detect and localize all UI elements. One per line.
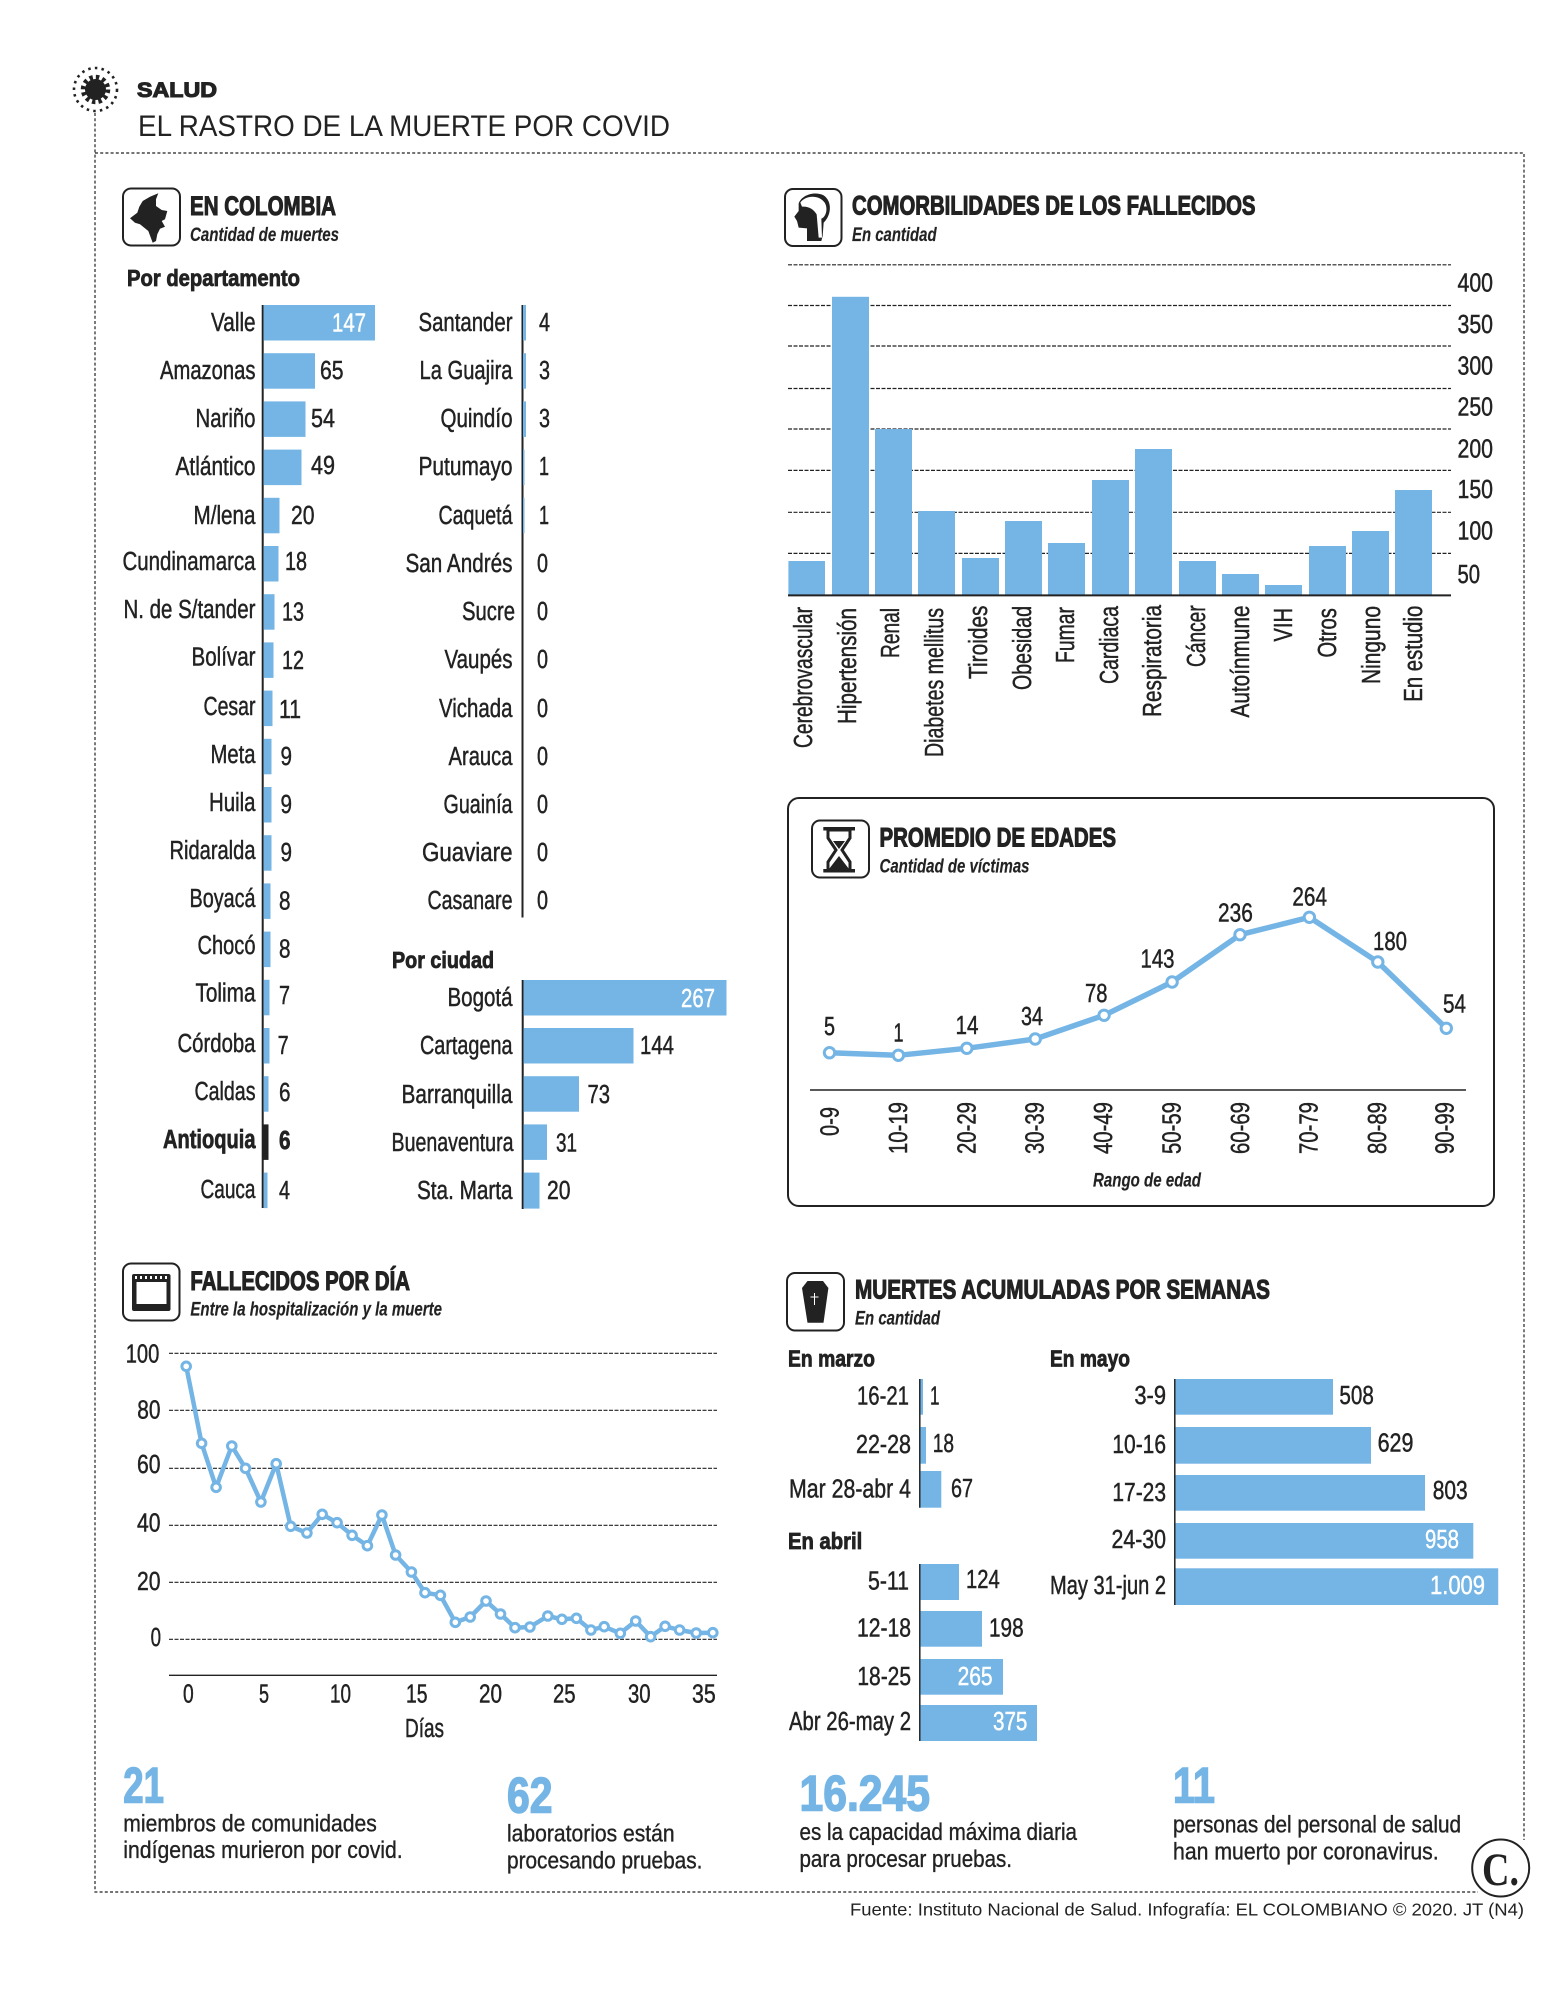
stat: 21	[123, 1757, 403, 1864]
title: EL RASTRO DE LA MUERTE POR COVID	[138, 110, 670, 143]
bar chart: marzo	[788, 1346, 973, 1508]
row: Vichada: 0	[537, 695, 548, 723]
age range labels: 50-59	[1159, 1102, 1187, 1154]
row: Meta: 9	[280, 743, 292, 771]
row: 16-21: 1	[930, 1382, 940, 1410]
row: Córdoba: Córdoba	[178, 1030, 256, 1058]
stat: 11: han muerto por coronavirus.	[1173, 1838, 1439, 1865]
y axis labels: 60	[137, 1451, 160, 1479]
age range labels: 10-19	[885, 1102, 913, 1154]
y axis labels: 200	[1458, 435, 1493, 463]
data values: 236	[1218, 899, 1253, 927]
x axis labels: Renal	[877, 608, 905, 658]
axis title: Días	[405, 1715, 444, 1743]
panel: muertes acumuladas	[787, 1273, 1498, 1741]
x axis labels: 35	[692, 1681, 716, 1709]
heading: en colombia: EN COLOMBIA	[190, 191, 336, 221]
row: M/lena: 20	[291, 502, 314, 530]
row: 18-25: 18-25	[857, 1663, 911, 1691]
row: Mar 28-abr 4: Mar 28-abr 4	[789, 1475, 911, 1503]
row: Barranquilla: Barranquilla	[402, 1081, 513, 1109]
stat: 11: personas del personal de salud	[1173, 1812, 1461, 1839]
row: Amazonas	[160, 353, 344, 389]
row: 22-28: 22-28	[856, 1431, 911, 1459]
data values: 34	[1021, 1003, 1043, 1031]
row: 18-25: 265	[958, 1663, 993, 1691]
row: Nariño	[196, 401, 335, 437]
row: Quindío: 3	[539, 405, 550, 433]
row: Cartagena: 144	[640, 1032, 674, 1060]
x axis labels: Cerebrovascular	[790, 607, 818, 748]
bar chart: comorbidities	[788, 265, 1493, 757]
row: Huila: 9	[280, 791, 292, 819]
row: 10-16: 10-16	[1112, 1431, 1166, 1459]
stat: 16.245: 16.245	[800, 1766, 930, 1822]
row: Atlántico: 49	[311, 452, 335, 480]
data values: 143	[1140, 946, 1174, 974]
row: Buenaventura	[392, 1124, 577, 1160]
data values: 264	[1292, 883, 1327, 911]
row: Cesar: Cesar	[204, 693, 256, 721]
x axis labels: Diabetes mellitus	[921, 608, 949, 757]
y axis labels: 0	[151, 1624, 161, 1652]
stat: 62: laboratorios están	[507, 1821, 675, 1848]
row: 10-16	[1112, 1427, 1414, 1464]
y axis labels	[126, 1340, 161, 1652]
row: Cauca: Cauca	[200, 1176, 256, 1204]
subheading: en mayo: En mayo	[1050, 1346, 1130, 1372]
row: Bogotá: 267	[681, 985, 715, 1013]
row: Sta. Marta: Sta. Marta	[417, 1177, 513, 1205]
row: Bogotá: Bogotá	[448, 984, 513, 1012]
bar chart: departments column 1	[122, 305, 375, 1208]
row: Ridaralda: 9	[280, 839, 292, 867]
row: Bogotá	[448, 980, 726, 1016]
row: Cartagena	[420, 1028, 674, 1064]
stat: 62: 62	[507, 1767, 552, 1823]
panel: promedio de edades	[788, 798, 1494, 1206]
row: Atlántico	[176, 450, 335, 485]
row: Boyacá	[190, 883, 290, 919]
y axis labels: 300	[1458, 353, 1493, 381]
row: Valle: Valle	[211, 309, 256, 337]
header	[74, 68, 670, 143]
row: N. de S/tander: N. de S/tander	[124, 596, 256, 624]
data values: 14	[956, 1012, 978, 1040]
row: Cartagena: Cartagena	[420, 1032, 513, 1060]
subheading: en abril: En abril	[788, 1528, 862, 1554]
panel: fallecidos por dia	[123, 1264, 717, 1743]
row: Abr 26-may 2: 375	[993, 1708, 1027, 1736]
x axis labels: VIH	[1270, 608, 1298, 642]
y axis labels: 80	[137, 1397, 160, 1425]
row: Sucre: Sucre	[462, 598, 515, 626]
x axis labels: Tiroides	[965, 606, 993, 679]
bar chart: abril	[788, 1528, 1037, 1741]
row: 5-11: 124	[966, 1566, 1000, 1594]
age range labels: 20-29	[953, 1102, 981, 1154]
row: May 31-jun 2: 1.009	[1430, 1572, 1485, 1600]
x axis labels: 20	[479, 1681, 502, 1709]
row: Valle: 147	[332, 310, 366, 338]
subheading: por departamento: Por departamento	[127, 265, 300, 291]
row: Córdoba: 7	[278, 1032, 289, 1060]
row: Putumayo: 1	[539, 453, 549, 481]
row: Cesar	[204, 691, 301, 726]
x axis labels: Hipertensión	[834, 608, 862, 724]
y axis labels: 350	[1458, 311, 1493, 339]
row: M/lena	[194, 498, 314, 533]
row: 12-18: 198	[989, 1615, 1024, 1643]
x axis labels	[790, 604, 1428, 757]
row: Caquetá: Caquetá	[438, 502, 513, 530]
row: Bolívar: 12	[282, 647, 304, 675]
panel: en colombia	[122, 188, 726, 1209]
bar chart: departments column 2	[406, 305, 550, 918]
age range labels: 90-99	[1431, 1102, 1459, 1154]
age range labels: 0-9	[816, 1107, 844, 1136]
x axis labels	[183, 1681, 716, 1709]
stat: 21: indígenas murieron por covid.	[123, 1837, 403, 1864]
row: Cundinamarca: 18	[285, 548, 307, 576]
row: 10-16: 629	[1378, 1430, 1414, 1458]
heading: fallecidos por dia: FALLECIDOS POR DÍA	[190, 1265, 410, 1296]
icon: virus	[74, 68, 117, 111]
x axis labels: Autoínmune	[1227, 606, 1255, 718]
row: Caldas: 6	[279, 1079, 290, 1107]
data values: 54	[1443, 990, 1466, 1018]
bar chart: cities	[392, 980, 726, 1209]
panel: comorbilidades	[785, 189, 1493, 757]
icon: calendar	[123, 1264, 180, 1320]
row: Ridaralda: Ridaralda	[170, 837, 256, 865]
row: Chocó: Chocó	[198, 932, 256, 960]
x axis labels: 0	[183, 1681, 194, 1709]
row: Guaviare: 0	[537, 839, 548, 867]
bar chart: mayo	[1050, 1346, 1498, 1605]
x axis labels: Obesidad	[1009, 606, 1037, 690]
row: Santander: Santander	[418, 309, 513, 337]
x axis labels: Otros	[1314, 608, 1342, 658]
line chart: daily deaths	[126, 1340, 717, 1743]
age range labels: 30-39	[1022, 1102, 1050, 1154]
stat: 11	[1173, 1757, 1461, 1865]
section label: salud: SALUD	[137, 79, 217, 102]
bars	[788, 297, 1432, 595]
data values: 78	[1085, 980, 1107, 1008]
row: May 31-jun 2	[1050, 1568, 1498, 1605]
row: Guainía: 0	[537, 791, 548, 819]
x axis labels: Respiratoria	[1139, 604, 1167, 717]
stat: 62: procesando pruebas.	[507, 1847, 702, 1874]
row: San Andrés: San Andrés	[406, 550, 512, 578]
stat: 62	[507, 1767, 702, 1874]
row: 17-23: 17-23	[1112, 1479, 1166, 1507]
x axis labels: Fumar	[1052, 607, 1080, 663]
stat: 16.245: es la capacidad máxima diaria	[800, 1819, 1078, 1846]
x axis labels: Cáncer	[1183, 605, 1211, 667]
row: Tolima: 7	[279, 982, 290, 1010]
row: Cundinamarca: Cundinamarca	[122, 548, 256, 576]
data values: 180	[1373, 928, 1407, 956]
row: 3-9: 3-9	[1134, 1382, 1166, 1410]
row: La Guajira: 3	[539, 357, 550, 385]
y axis labels: 40	[137, 1510, 160, 1538]
row: 18-25	[857, 1659, 1003, 1695]
subheading: por ciudad: Por ciudad	[392, 947, 494, 973]
row: Vaupés: 0	[537, 646, 548, 674]
data points	[182, 1362, 717, 1641]
stat: 21: miembros de comunidades	[123, 1811, 377, 1838]
age range labels: 40-49	[1090, 1102, 1118, 1154]
row: Valle	[211, 305, 375, 340]
row: 17-23	[1112, 1475, 1468, 1511]
x axis labels: En estudio	[1400, 606, 1428, 702]
heading: comorbilidades: COMORBILIDADES DE LOS FALLECIDOS	[852, 191, 1256, 221]
x axis labels: 30	[628, 1681, 651, 1709]
stat: 21: 21	[123, 1757, 164, 1813]
data values: 1	[894, 1020, 904, 1048]
x axis labels: 15	[406, 1681, 428, 1709]
icon: head	[785, 189, 842, 246]
row: Arauca: 0	[537, 743, 548, 771]
y axis labels: 250	[1458, 393, 1493, 421]
row: Cauca	[200, 1173, 290, 1208]
row: 12-18	[857, 1611, 1024, 1647]
row: Atlántico: Atlántico	[176, 453, 256, 481]
row: Meta: Meta	[210, 741, 256, 769]
heading: promedio de edades: PROMEDIO DE EDADES	[880, 823, 1116, 853]
row: May 31-jun 2: May 31-jun 2	[1050, 1572, 1166, 1600]
row: Quindío	[440, 401, 550, 437]
row: Vaupés: Vaupés	[444, 646, 512, 674]
row: 5-11: 5-11	[868, 1567, 909, 1595]
row: 12-18: 12-18	[857, 1615, 911, 1643]
row: 24-30: 24-30	[1112, 1526, 1166, 1554]
source note: Fuente: Instituto Nacional de Salud. Infografía: EL COLOMBIANO © 2020. JT (N4)	[850, 1900, 1524, 1920]
subtitle: Cantidad de víctimas	[880, 856, 1030, 878]
row: Guainía: Guainía	[444, 791, 513, 819]
row: 16-21: 16-21	[857, 1382, 909, 1410]
row: Sucre: 0	[537, 598, 548, 626]
heading: muertes acumuladas: MUERTES ACUMULADAS POR SEMANAS	[855, 1274, 1270, 1304]
row: Bolívar: Bolívar	[192, 644, 256, 672]
row: Córdoba	[178, 1028, 289, 1064]
stat: 11: 11	[1173, 1757, 1215, 1813]
row: Caldas: Caldas	[194, 1078, 256, 1106]
data points	[824, 912, 1452, 1061]
row: Guaviare: Guaviare	[422, 839, 512, 867]
row: Sta. Marta: 20	[547, 1177, 570, 1205]
row: 24-30	[1112, 1523, 1473, 1559]
subtitle: Cantidad de muertes	[190, 224, 339, 246]
x axis labels: 25	[553, 1681, 576, 1709]
row: 24-30: 958	[1425, 1526, 1459, 1554]
icon: coffin	[787, 1273, 844, 1330]
row: Casanare: Casanare	[428, 887, 512, 915]
y axis labels: 400	[1458, 270, 1493, 298]
row: 3-9	[1134, 1379, 1374, 1415]
row: Arauca: Arauca	[448, 743, 513, 771]
row: Antioquia: Antioquia	[163, 1126, 256, 1154]
row: La Guajira: La Guajira	[420, 357, 513, 385]
age range labels: 80-89	[1364, 1102, 1392, 1154]
row: Boyacá: 8	[279, 887, 290, 915]
subtitle: En cantidad	[855, 1307, 941, 1329]
row: Quindío: Quindío	[440, 405, 512, 433]
row: Mar 28-abr 4: 67	[951, 1475, 973, 1503]
y axis labels: 100	[1458, 518, 1493, 546]
row: Barranquilla	[402, 1076, 610, 1112]
row: 3-9: 508	[1339, 1382, 1374, 1410]
row: Buenaventura: 31	[556, 1130, 577, 1158]
row: Caldas	[194, 1076, 290, 1112]
row: Vichada: Vichada	[439, 695, 513, 723]
row: Abr 26-may 2	[789, 1705, 1037, 1741]
row: Casanare: 0	[537, 887, 548, 915]
row: Buenaventura: Buenaventura	[392, 1129, 514, 1157]
row: Putumayo	[418, 450, 549, 485]
row: Chocó	[198, 932, 290, 967]
row: N. de S/tander: 13	[282, 599, 304, 627]
row: 22-28	[856, 1427, 954, 1464]
row: Meta	[210, 739, 292, 774]
subtitle: En cantidad	[852, 224, 937, 246]
icon: hourglass	[812, 820, 869, 878]
subtitle: Entre la hospitalización y la muerte	[190, 1299, 442, 1321]
row: Huila: Huila	[209, 789, 256, 817]
row: Amazonas: 65	[320, 357, 344, 385]
axis title: Rango de edad	[1093, 1170, 1202, 1192]
subheading: en marzo: En marzo	[788, 1346, 875, 1372]
row: San Andrés: 0	[537, 550, 548, 578]
x axis labels: Ninguno	[1358, 606, 1386, 684]
row: 22-28: 18	[933, 1430, 954, 1458]
y axis labels: 100	[126, 1340, 159, 1368]
row: M/lena: M/lena	[194, 502, 256, 530]
logo: el colombiano: C.	[1482, 1844, 1519, 1896]
row: 16-21	[857, 1379, 940, 1415]
row: Cesar: 11	[279, 696, 301, 724]
age range labels: 60-69	[1227, 1102, 1255, 1154]
row: Santander: 4	[539, 309, 550, 337]
icon: colombia map	[123, 188, 180, 246]
row: Putumayo: Putumayo	[418, 453, 512, 481]
row: Nariño: 54	[311, 405, 335, 433]
row: Nariño: Nariño	[196, 405, 256, 433]
row: Mar 28-abr 4	[789, 1471, 973, 1508]
data values	[824, 883, 1466, 1048]
row: Antioquia: 6	[279, 1127, 290, 1155]
row: Huila	[209, 787, 292, 822]
row: Sta. Marta	[417, 1173, 570, 1209]
data values: 5	[824, 1013, 835, 1041]
x axis labels: 5	[259, 1681, 269, 1709]
stat: 16.245	[800, 1766, 1078, 1873]
row: Boyacá: Boyacá	[190, 885, 256, 913]
age range labels	[816, 1102, 1459, 1154]
row: 17-23: 803	[1433, 1477, 1468, 1505]
stat: 16.245: para procesar pruebas.	[800, 1846, 1012, 1873]
row: Chocó: 8	[279, 936, 290, 964]
row: Tolima	[196, 980, 290, 1015]
row: Tolima: Tolima	[196, 980, 256, 1008]
y axis labels: 20	[137, 1568, 160, 1596]
row: Abr 26-may 2: Abr 26-may 2	[789, 1708, 911, 1736]
x axis labels: Cardiaca	[1096, 605, 1124, 684]
y axis labels: 50	[1458, 561, 1480, 589]
x axis labels: 10	[330, 1681, 351, 1709]
row: Barranquilla: 73	[588, 1081, 610, 1109]
row: 5-11	[868, 1564, 1000, 1600]
row: Caquetá	[438, 498, 549, 533]
age range labels: 70-79	[1295, 1102, 1323, 1154]
line chart: ages	[810, 883, 1466, 1192]
y axis labels: 150	[1458, 476, 1493, 504]
row: Caquetá: 1	[539, 502, 549, 530]
y axis labels	[1458, 270, 1493, 589]
row: Bolívar	[192, 642, 304, 678]
row: Amazonas: Amazonas	[160, 357, 256, 385]
row: Cauca: 4	[279, 1177, 290, 1205]
